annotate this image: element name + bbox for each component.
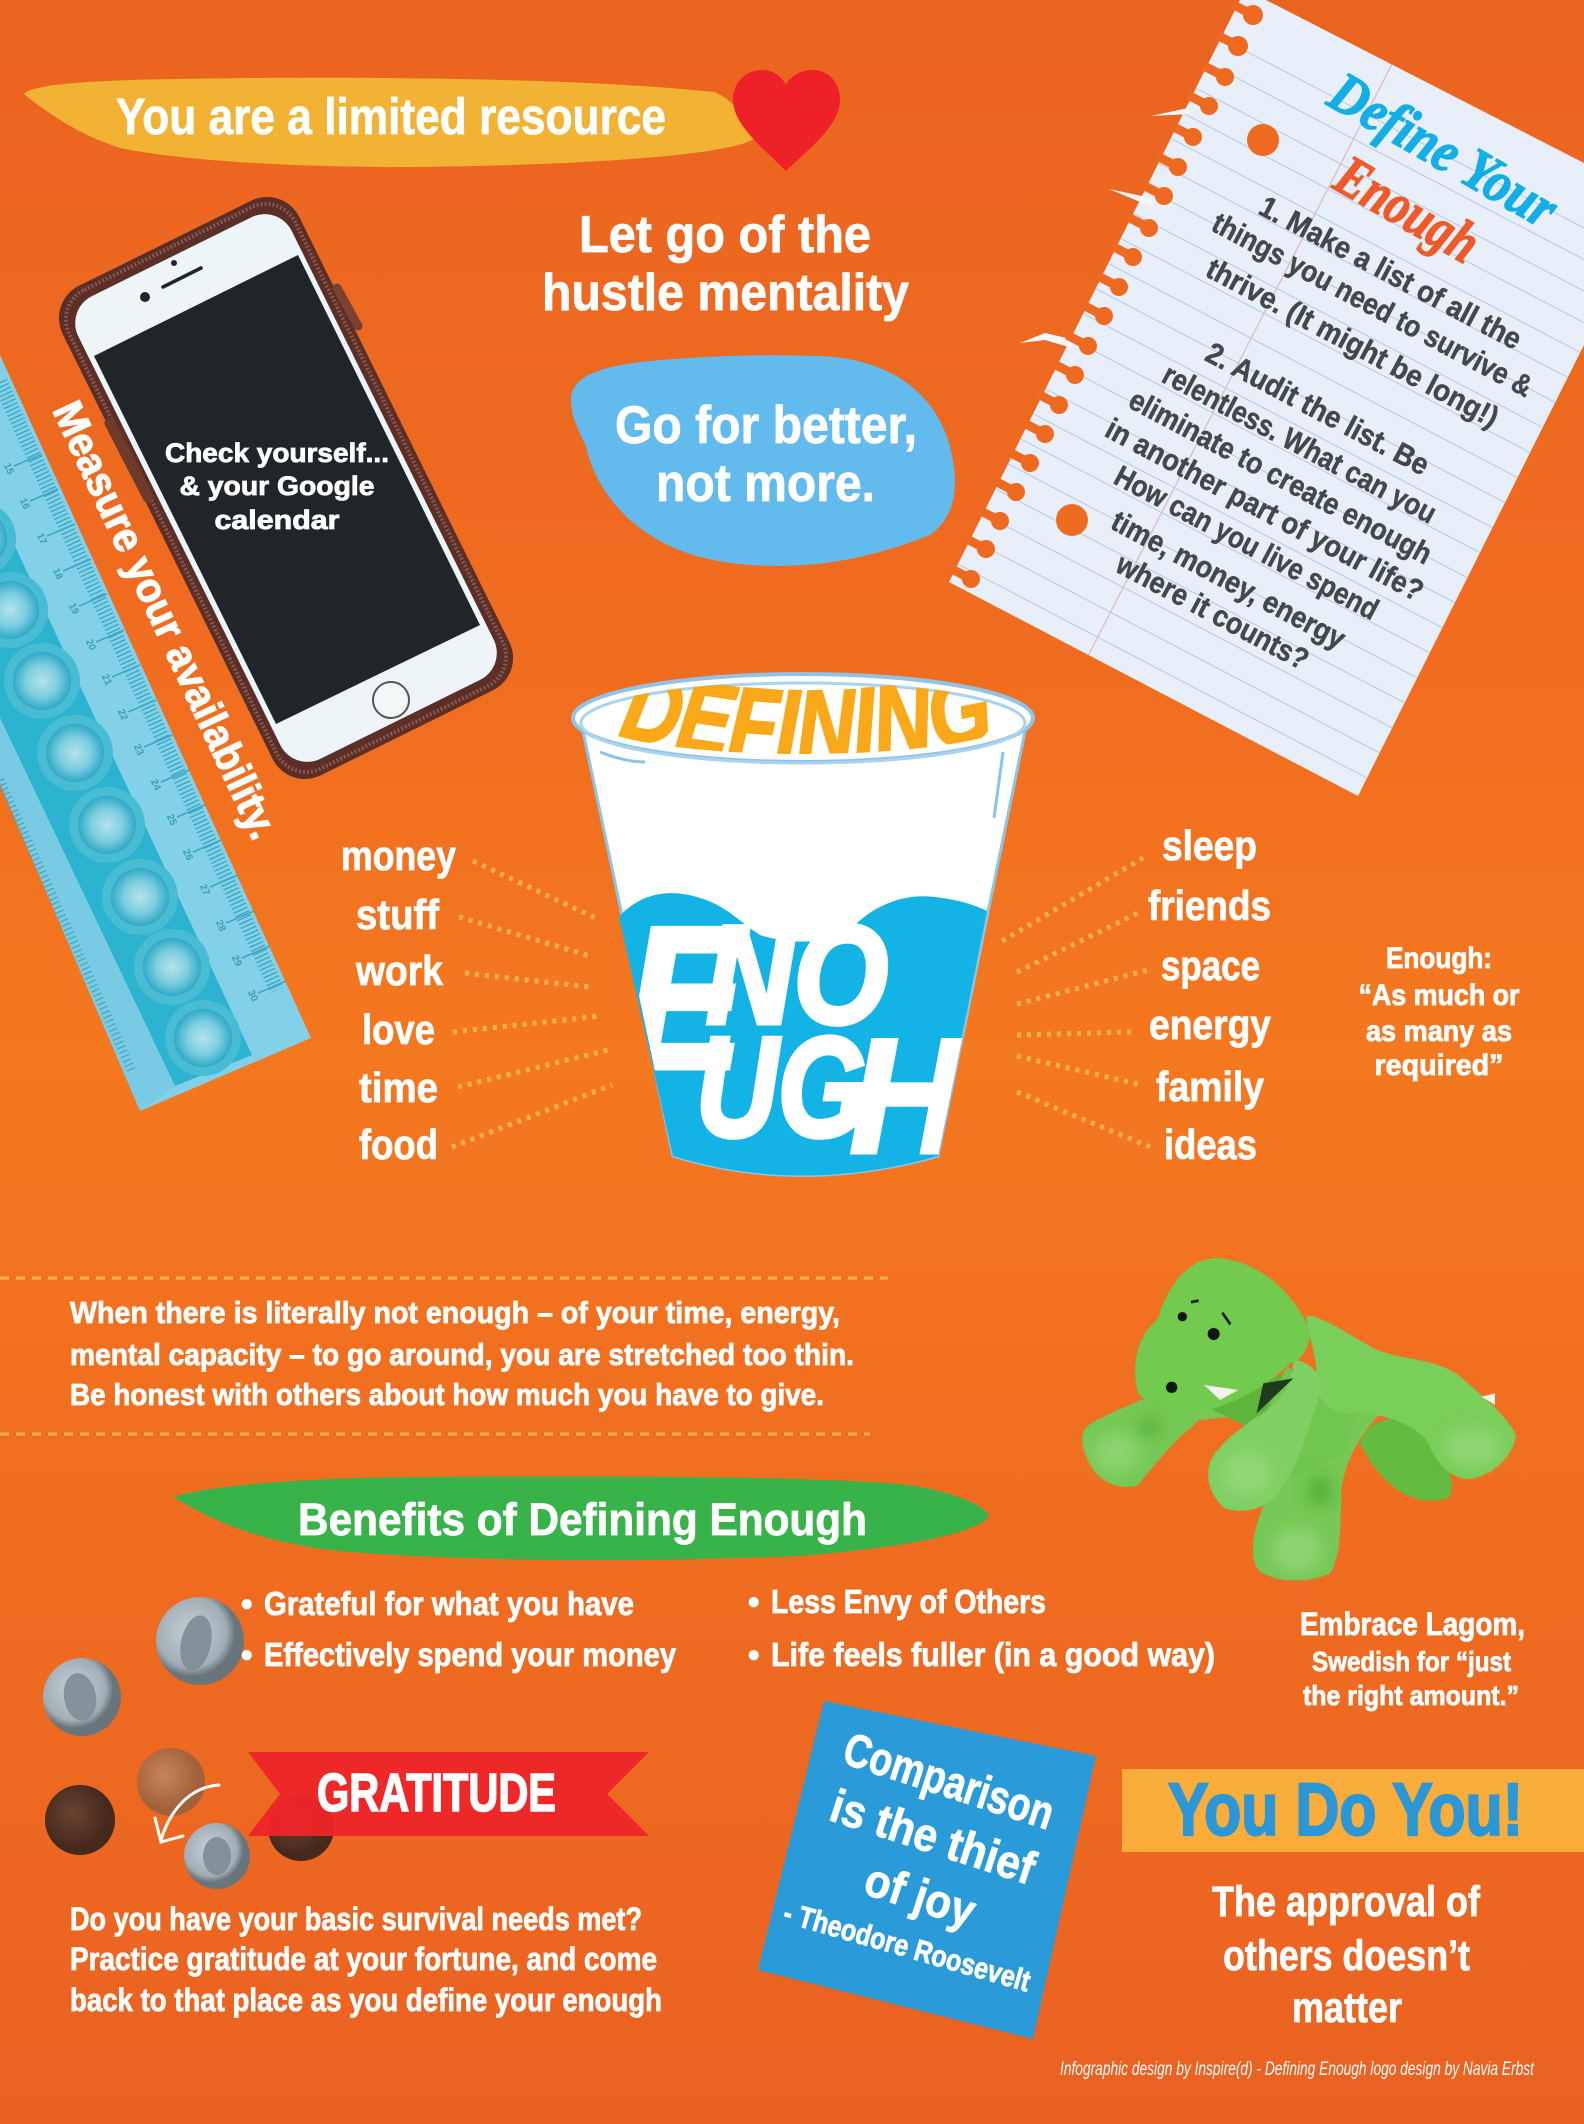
note steps: time, money, energy [1106, 505, 1351, 656]
dotted rays: right [1002, 855, 1155, 1149]
ruler with pop-it bubbles: 28 [213, 919, 228, 934]
ruler with pop-it bubbles: 20 [83, 638, 98, 653]
ruler with pop-it bubbles [0, 355, 311, 1111]
text block: gratitude: back to that place as you define your enough [70, 1982, 662, 2018]
text block: gratitude: Practice gratitude at your fortune, and come [70, 1941, 657, 1977]
ribbon: gratitude: GRATITUDE [317, 1763, 556, 1823]
text: check yourself: & your Google [180, 471, 374, 501]
note steps: things you need to survive & [1207, 207, 1538, 404]
quote card: comparison: Comparison [837, 1722, 1061, 1839]
glass: defining enough [571, 672, 1035, 1177]
word list: right: family [1156, 1063, 1265, 1110]
banner: you are a limited resource: You are a limited resource [116, 88, 666, 145]
text block: stretched too thin: Be honest with others about how much you have to give. [70, 1377, 824, 1412]
callout: go for better, not more: not more. [656, 454, 875, 513]
benefits list: right: Less Envy of Others [771, 1583, 1046, 1620]
rim with defining: DEFINING [618, 684, 988, 754]
text: check yourself [165, 438, 389, 535]
note steps: in another part of your life? [1100, 412, 1429, 608]
note steps: thrive. (It might be long!) [1201, 252, 1504, 434]
text: measure your availability: Measure your availability. [44, 394, 288, 846]
definition: enough: required” [1374, 1049, 1504, 1082]
text block: stretched too thin: When there is literally not enough – of your time, energy, [70, 1295, 840, 1330]
word list: left [341, 832, 457, 1168]
note steps [1100, 190, 1538, 677]
banner: you are a limited resource [24, 78, 755, 167]
word list: left: money [341, 832, 457, 879]
ruler with pop-it bubbles: 19 [66, 602, 81, 617]
ruler with pop-it bubbles: 21 [99, 673, 114, 688]
benefits list: left [241, 1585, 677, 1673]
benefits list: left: • [241, 1636, 253, 1673]
note steps: where it counts? [1110, 547, 1314, 677]
note steps: eliminate to create enough [1123, 383, 1437, 571]
phone [47, 185, 525, 791]
icon: heart [733, 70, 840, 171]
rim with defining [571, 672, 1035, 764]
word list: right: friends [1148, 882, 1271, 929]
text block: gratitude: Do you have your basic survival needs met? [70, 1901, 642, 1937]
heading: let go of the hustle mentality: hustle mentality [542, 264, 909, 322]
word: enough: H [850, 1006, 965, 1187]
ruler with pop-it bubbles: 18 [50, 567, 65, 582]
ruler with pop-it bubbles: 15 [1, 462, 16, 477]
dotted rays: left [452, 861, 612, 1147]
benefits list: right: • [748, 1636, 760, 1673]
benefits list: left: Effectively spend your money [264, 1636, 677, 1673]
water [619, 893, 987, 1176]
note title: Enough [1324, 142, 1491, 276]
word: enough: E [626, 885, 749, 1112]
quote card: comparison: of joy [858, 1852, 982, 1937]
caption: embrace lagom: Swedish for “just [1312, 1646, 1511, 1677]
word list: right [1148, 822, 1272, 1168]
definition: enough: as many as [1366, 1015, 1512, 1048]
note steps: How can you live spend [1109, 460, 1384, 627]
arrow [155, 1785, 219, 1842]
word list: right: ideas [1164, 1121, 1257, 1168]
note steps: 2. Audit the list. Be [1200, 337, 1435, 482]
word list: left: work [355, 947, 444, 994]
plush frog [1082, 1258, 1516, 1580]
note steps: 1. Make a list of all the [1254, 190, 1527, 356]
definition: enough: Enough: [1386, 942, 1492, 975]
ruler with pop-it bubbles: 27 [197, 883, 212, 898]
word list: left: love [362, 1006, 435, 1053]
callout: go for better, not more: Go for better, [615, 396, 917, 455]
callout: go for better, not more [571, 355, 955, 566]
text: check yourself: calendar [214, 505, 340, 535]
text block: stretched too thin: mental capacity – to go around, you are stretched too thin. [70, 1337, 854, 1372]
caption: embrace lagom: the right amount.” [1303, 1680, 1519, 1711]
caption: embrace lagom [1300, 1606, 1525, 1711]
definition: enough [1358, 942, 1520, 1082]
caption: embrace lagom: Embrace Lagom, [1300, 1606, 1525, 1642]
ruler with pop-it bubbles: 23 [131, 743, 146, 758]
ruler with pop-it bubbles: 17 [34, 532, 49, 547]
quote card: comparison [758, 1701, 1096, 2039]
word list: right: space [1161, 942, 1260, 989]
text: approval of others [1212, 1878, 1481, 2032]
ruler with pop-it bubbles: 22 [115, 708, 130, 723]
banner: benefits of defining enough: Benefits of Defining Enough [298, 1494, 867, 1545]
note steps: relentless. What can you [1157, 358, 1442, 530]
benefits list: left: • [241, 1585, 253, 1622]
ruler with pop-it bubbles: 26 [180, 848, 195, 863]
ruler with pop-it bubbles: 30 [245, 989, 260, 1004]
word list: left: food [359, 1121, 438, 1168]
word list: left: stuff [356, 891, 440, 938]
banner: benefits of defining enough [173, 1477, 989, 1560]
text block: gratitude [70, 1901, 662, 2018]
text: approval of others: others doesn’t [1223, 1932, 1470, 1980]
text block: stretched too thin [70, 1295, 854, 1412]
quote card: comparison: is the thief [824, 1779, 1042, 1895]
heading: let go of the hustle mentality: Let go of the [579, 206, 871, 264]
quote card: comparison: - Theodore Roosevelt [780, 1896, 1034, 1998]
ruler with pop-it bubbles: 29 [229, 954, 244, 969]
text: approval of others: The approval of [1212, 1878, 1481, 1926]
word: enough: UG [696, 1008, 866, 1167]
word list: left: time [359, 1064, 438, 1111]
paper note: define your enough [941, 0, 1584, 852]
word: enough: NO [706, 896, 888, 1053]
word list: right: sleep [1162, 822, 1257, 869]
definition: enough: “As much or [1358, 979, 1520, 1012]
benefits list: right [748, 1583, 1215, 1673]
benefits list: left: Grateful for what you have [264, 1585, 634, 1622]
text: check yourself: Check yourself... [165, 438, 389, 468]
word list: right: energy [1149, 1001, 1272, 1048]
ruler with pop-it bubbles: 25 [164, 813, 179, 828]
benefits list: right: Life feels fuller (in a good way) [771, 1636, 1215, 1673]
text: approval of others: matter [1292, 1984, 1402, 2032]
benefits list: right: • [748, 1583, 760, 1620]
ruler with pop-it bubbles: 16 [17, 497, 32, 512]
heading: let go of the hustle mentality [542, 206, 909, 322]
coins [43, 1597, 334, 1889]
ruler with pop-it bubbles: 24 [148, 778, 163, 793]
ribbon: gratitude [248, 1752, 649, 1836]
word: enough [639, 923, 962, 1154]
